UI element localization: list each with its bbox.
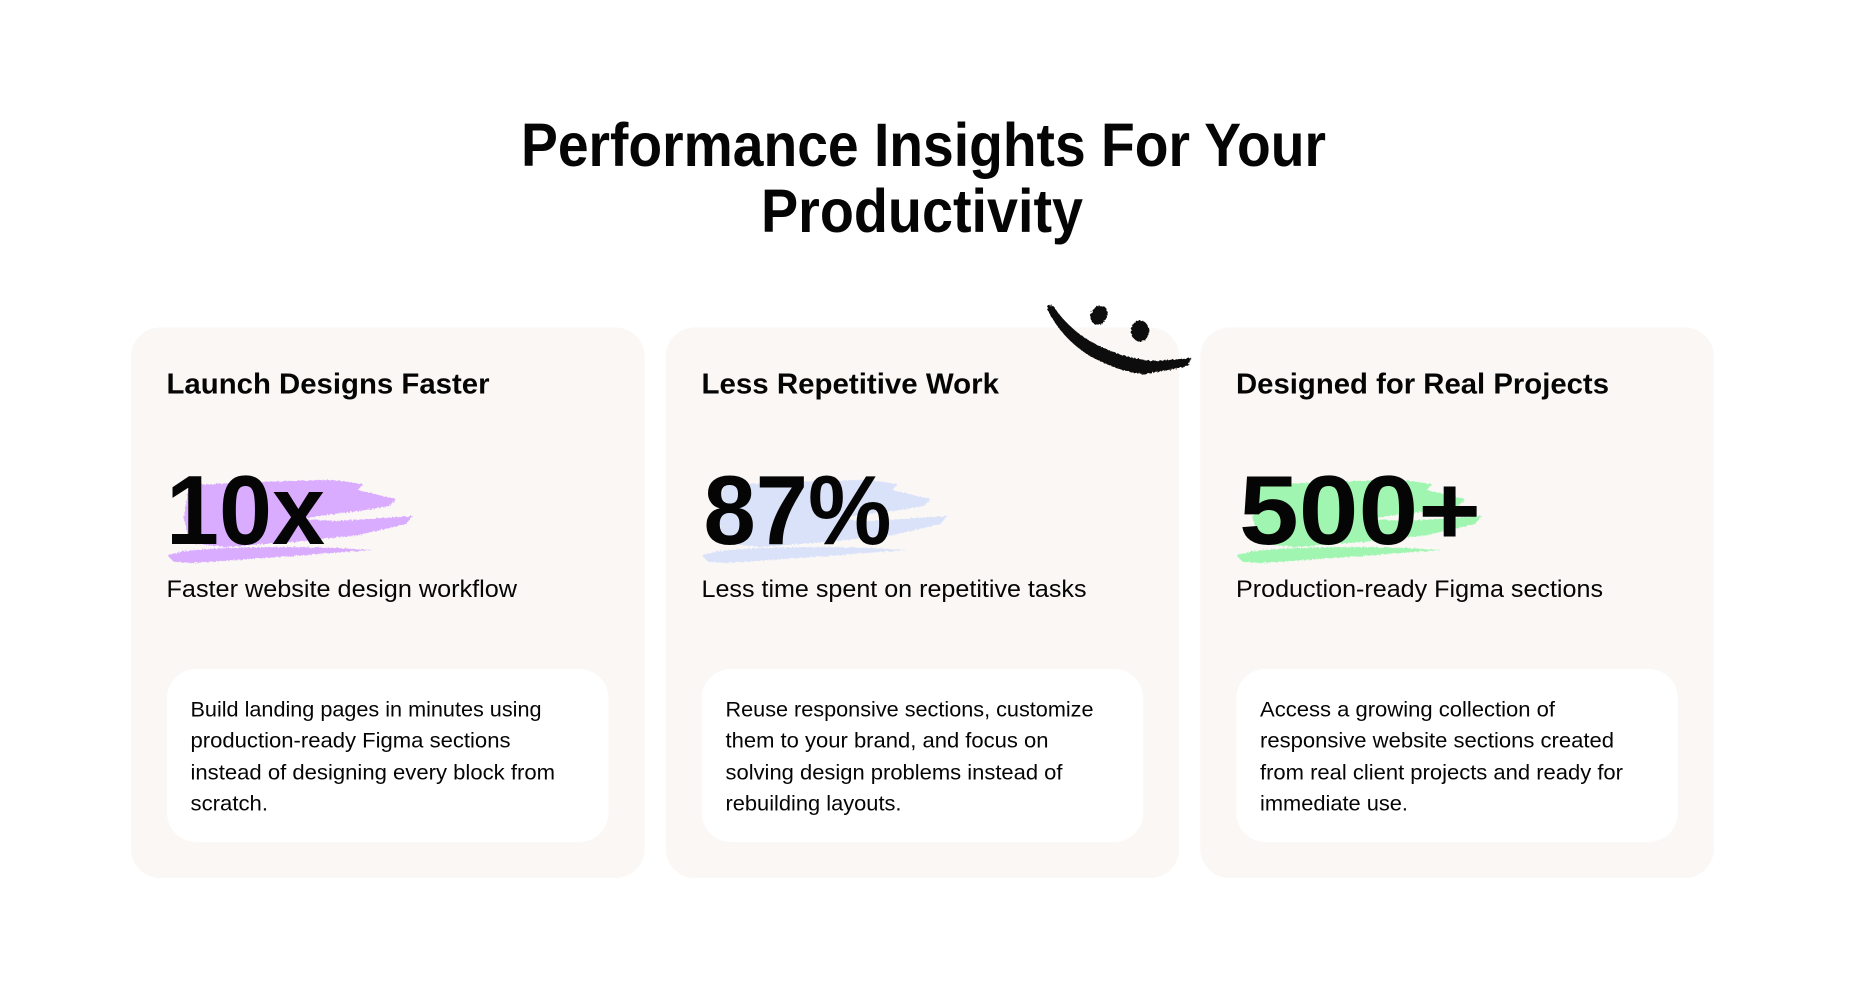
description card: responsive website sections created	[1260, 728, 1614, 752]
title: Productivity	[761, 177, 1083, 245]
description card: scratch.	[190, 792, 268, 816]
brush stroke: green	[1237, 480, 1482, 563]
description card	[167, 669, 608, 842]
title	[521, 111, 1326, 245]
description card: Reuse responsive sections, customize	[726, 698, 1094, 722]
brush stroke: blue	[702, 480, 948, 563]
heading: launch designs faster: Launch Designs Faster	[166, 368, 490, 400]
description card	[1236, 669, 1678, 842]
description card: Access a growing collection of	[1260, 698, 1555, 722]
description card: rebuilding layouts.	[726, 792, 902, 816]
stat label: Production-ready Figma sections	[1236, 576, 1603, 603]
title: Performance Insights For Your	[521, 111, 1326, 179]
stat: 500+: 500+	[1239, 455, 1481, 565]
icon: hand-drawn smile	[1047, 302, 1191, 374]
panel: designed for real projects	[1200, 328, 1714, 878]
panel: launch designs faster	[131, 328, 644, 878]
description card: production-ready Figma sections	[190, 728, 511, 752]
panel: less repetitive work	[666, 328, 1179, 878]
description card: Build landing pages in minutes using	[190, 698, 542, 722]
description card: solving design problems instead of	[726, 760, 1063, 784]
stat label: Less time spent on repetitive tasks	[702, 576, 1086, 603]
brush stroke: purple	[168, 480, 413, 563]
stat: 87%: 87%	[704, 455, 892, 565]
stat: 10x: 10x	[166, 455, 325, 565]
stat label: Faster website design workflow	[166, 576, 517, 603]
heading: designed for real projects: Designed for Real Projects	[1236, 368, 1609, 400]
description card: from real client projects and ready for	[1260, 760, 1623, 784]
description card: immediate use.	[1260, 792, 1408, 816]
heading: less repetitive work: Less Repetitive Work	[702, 368, 1000, 400]
description card	[702, 669, 1143, 842]
description card: instead of designing every block from	[190, 760, 555, 784]
description card: them to your brand, and focus on	[726, 728, 1048, 752]
